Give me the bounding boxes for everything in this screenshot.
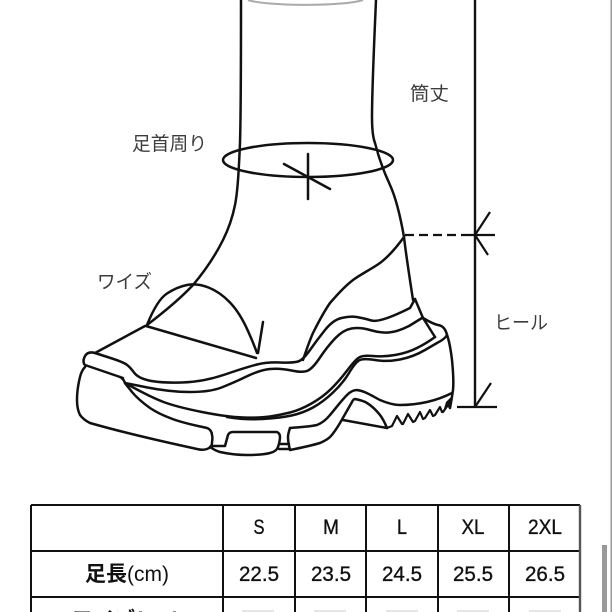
label: heel: ヒール [494,313,548,334]
right edge line [610,0,612,612]
header row [254,516,562,539]
heel pod upper lip [290,390,452,428]
outsole centre pod [210,432,280,455]
heel side outline [447,335,453,408]
toe box top line [95,326,145,353]
shaft top opening [248,0,363,5]
heel arch [343,420,387,428]
header row: L [397,516,407,539]
outsole heel pod [288,399,387,450]
foot length row: 足長(cm) [85,563,169,586]
header row: 2XL [528,516,562,539]
height dimension line [405,0,497,408]
boot line drawing [77,0,453,455]
label: shaft height: 筒丈 [410,83,449,105]
midsole lower line [227,335,447,419]
foot length row: 22.5 [239,563,279,586]
second welt line [125,318,422,392]
clipped row values, tops only [242,610,561,612]
heel counter [303,237,404,360]
foot length row: 24.5 [382,563,422,586]
scrollbar [602,545,607,612]
foot length row: 25.5 [453,563,493,586]
header row: M [323,516,339,539]
foot length row: 26.5 [525,563,565,586]
size table [31,505,580,612]
shaft and upper outline [147,0,241,325]
tread teeth [387,405,450,428]
ankle circumference ellipse [223,143,393,199]
width measure line [146,326,256,358]
upper welt line [84,299,415,383]
label: width: ワイズ [97,271,152,293]
width arc arrow [147,284,263,353]
header row: XL [462,516,484,539]
pod connector [279,444,290,449]
midsole top line [125,337,435,418]
collar back [415,299,435,337]
outsole toe pod [77,367,212,450]
foot length row: 23.5 [311,563,351,586]
header row: S [254,516,264,539]
foot length row [85,563,565,586]
label: ankle circumference: 足首周り [132,133,207,155]
